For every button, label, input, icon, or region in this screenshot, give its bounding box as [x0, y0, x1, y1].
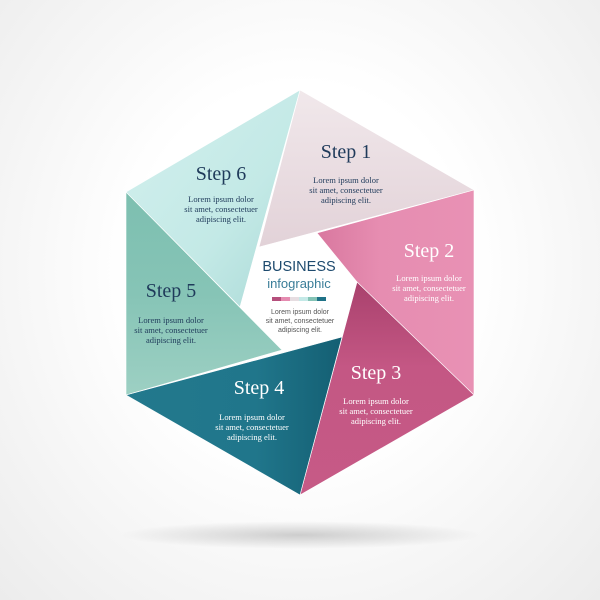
text: step 3: Lorem ipsum dolor: [343, 396, 409, 406]
text: step 4: adipiscing elit.: [227, 432, 277, 442]
text: step 2: sit amet, consectetuer: [392, 283, 466, 293]
center hexagon: [240, 233, 357, 350]
text: step 5: sit amet, consectetuer: [134, 325, 208, 335]
panel: step 6: [126, 90, 300, 307]
center title: infographic: [267, 276, 331, 291]
center title: [262, 259, 336, 291]
text: step 3: adipiscing elit.: [351, 416, 401, 426]
text: step 4: Lorem ipsum dolor: [219, 412, 285, 422]
text: step 5: adipiscing elit.: [146, 335, 196, 345]
heading: step 6: Step 6: [196, 163, 246, 185]
heading: step 4: Step 4: [234, 377, 284, 399]
heading: step 5: Step 5: [146, 280, 196, 302]
text: step 6: adipiscing elit.: [196, 214, 246, 224]
text: step 1: adipiscing elit.: [321, 195, 371, 205]
color bar legend: [272, 297, 326, 301]
panel: step 3: [300, 282, 474, 495]
panel: step 5: [126, 192, 282, 395]
text: step 1: sit amet, consectetuer: [309, 185, 383, 195]
center text: sit amet, consectetuer: [266, 318, 335, 325]
center title: BUSINESS: [262, 259, 336, 275]
text: step 3: sit amet, consectetuer: [339, 406, 413, 416]
panel: step 1: [259, 90, 474, 247]
center text: Lorem ipsum dolor: [271, 309, 330, 316]
text: step 4: sit amet, consectetuer: [215, 422, 289, 432]
panel: step 4: [126, 337, 342, 495]
text: step 2: Lorem ipsum dolor: [396, 273, 462, 283]
text: step 1: Lorem ipsum dolor: [313, 175, 379, 185]
text: step 6: sit amet, consectetuer: [184, 204, 258, 214]
text: step 5: Lorem ipsum dolor: [138, 315, 204, 325]
panel: step 2: [317, 190, 474, 395]
heading: step 2: Step 2: [404, 240, 454, 262]
text: step 6: Lorem ipsum dolor: [188, 194, 254, 204]
center text: adipiscing elit.: [278, 327, 322, 334]
heading: step 3: Step 3: [351, 362, 401, 384]
heading: step 1: Step 1: [321, 141, 371, 163]
text: step 2: adipiscing elit.: [404, 293, 454, 303]
shadow: [120, 521, 480, 549]
